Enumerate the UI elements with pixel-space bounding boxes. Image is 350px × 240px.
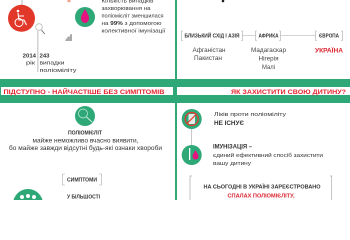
icon: small hand: [65, 34, 72, 41]
label: symptoms: СИМПТОМИ: [67, 178, 97, 184]
icon: wheelchair in red circle: [8, 0, 35, 32]
text: Ukraine: УКРАЇНА: [315, 48, 344, 54]
text: Asia countries: Пакистан: [194, 56, 222, 62]
icon: people: [13, 189, 43, 219]
text: vaccination statistic: захворювання на: [102, 6, 152, 12]
callout: outbreak notice: [190, 176, 332, 200]
text: vaccination statistic: на 99% з допомогою: [102, 21, 162, 27]
text: 243 polio cases: [40, 54, 77, 74]
text: Africa countries: Малі: [262, 65, 275, 71]
text: immunization: вашу дитину: [213, 161, 251, 167]
panel: banner left: [1, 87, 173, 96]
text: no cure: Ліків проти поліоміліту: [214, 112, 286, 118]
label: symptoms: [62, 174, 102, 185]
icon: no medicine: [182, 109, 202, 129]
callout: outbreak notice: СПАЛАХ ПОЛІОМІЄЛІТУ,: [228, 194, 295, 200]
text: immunization: єдиний ефективний спосіб захистити: [213, 152, 323, 159]
panel: banner left: ПІДСТУПНО - НАЙЧАСТІШЕ БЕЗ СИМПТОМІВ: [4, 87, 165, 96]
text: polio detection: майже неможливо вчасно виявити,: [32, 138, 139, 144]
marker: black dot: [222, 0, 224, 2]
label: Africa: АФРИКА: [258, 34, 279, 40]
text: 243 polio cases: випадки: [40, 60, 64, 66]
label: Europe: ЄВРОПА: [319, 34, 339, 40]
text: 2014 year: рік: [26, 60, 36, 66]
text: Asia countries: Афганістан: [192, 48, 226, 54]
connector line: [191, 129, 192, 145]
icon: magnifier on timeline: [36, 24, 45, 72]
text: no cure: [214, 112, 286, 127]
text: Asia countries: [192, 48, 226, 62]
text: Africa countries: Нігерія: [258, 56, 278, 62]
label: Middle East and Asia: БЛИЗЬКИЙ СХІД І АЗІЯ: [184, 32, 240, 40]
text: vaccination statistic: [102, 0, 166, 34]
text: polio detection: ПОЛІОМІЄЛІТ: [68, 130, 103, 136]
callout: outbreak notice: НА СЬОГОДНІ В УКРАЇНІ ЗАРЕЄСТРОВАНО: [204, 184, 321, 190]
text: Africa countries: Мадагаскар: [251, 48, 287, 54]
icon: vaccine drop: [75, 7, 95, 27]
text: no cure: НЕ ІСНУЄ: [214, 120, 245, 127]
text: immunization: [213, 144, 323, 167]
panel: banner right: ЯК ЗАХИСТИТИ СВОЮ ДИТИНУ?: [231, 89, 346, 96]
chart: regions timeline: [182, 31, 344, 71]
panel: banner right: [177, 87, 350, 96]
text: immunization: ІМУНІЗАЦІЯ –: [213, 144, 253, 150]
text: 243 polio cases: 243: [40, 54, 50, 60]
text: vaccination statistic: поліомієліт зменшилася: [102, 14, 164, 20]
text: 2014 year: 2014: [23, 54, 37, 60]
text: Africa countries: [251, 48, 287, 71]
text: polio detection: [9, 130, 162, 152]
text: 243 polio cases: поліоміліту: [40, 68, 77, 74]
text: vaccination statistic: колективної імунізації: [102, 28, 166, 34]
icon: small x mark: [68, 0, 70, 2]
icon: syringe and drop: [182, 145, 202, 165]
text: 2014 year: [23, 54, 37, 66]
text: polio detection: бо майже завжди відсутні будь-які ознаки хвороби: [9, 145, 162, 152]
icon: green magnifier: [75, 106, 95, 126]
